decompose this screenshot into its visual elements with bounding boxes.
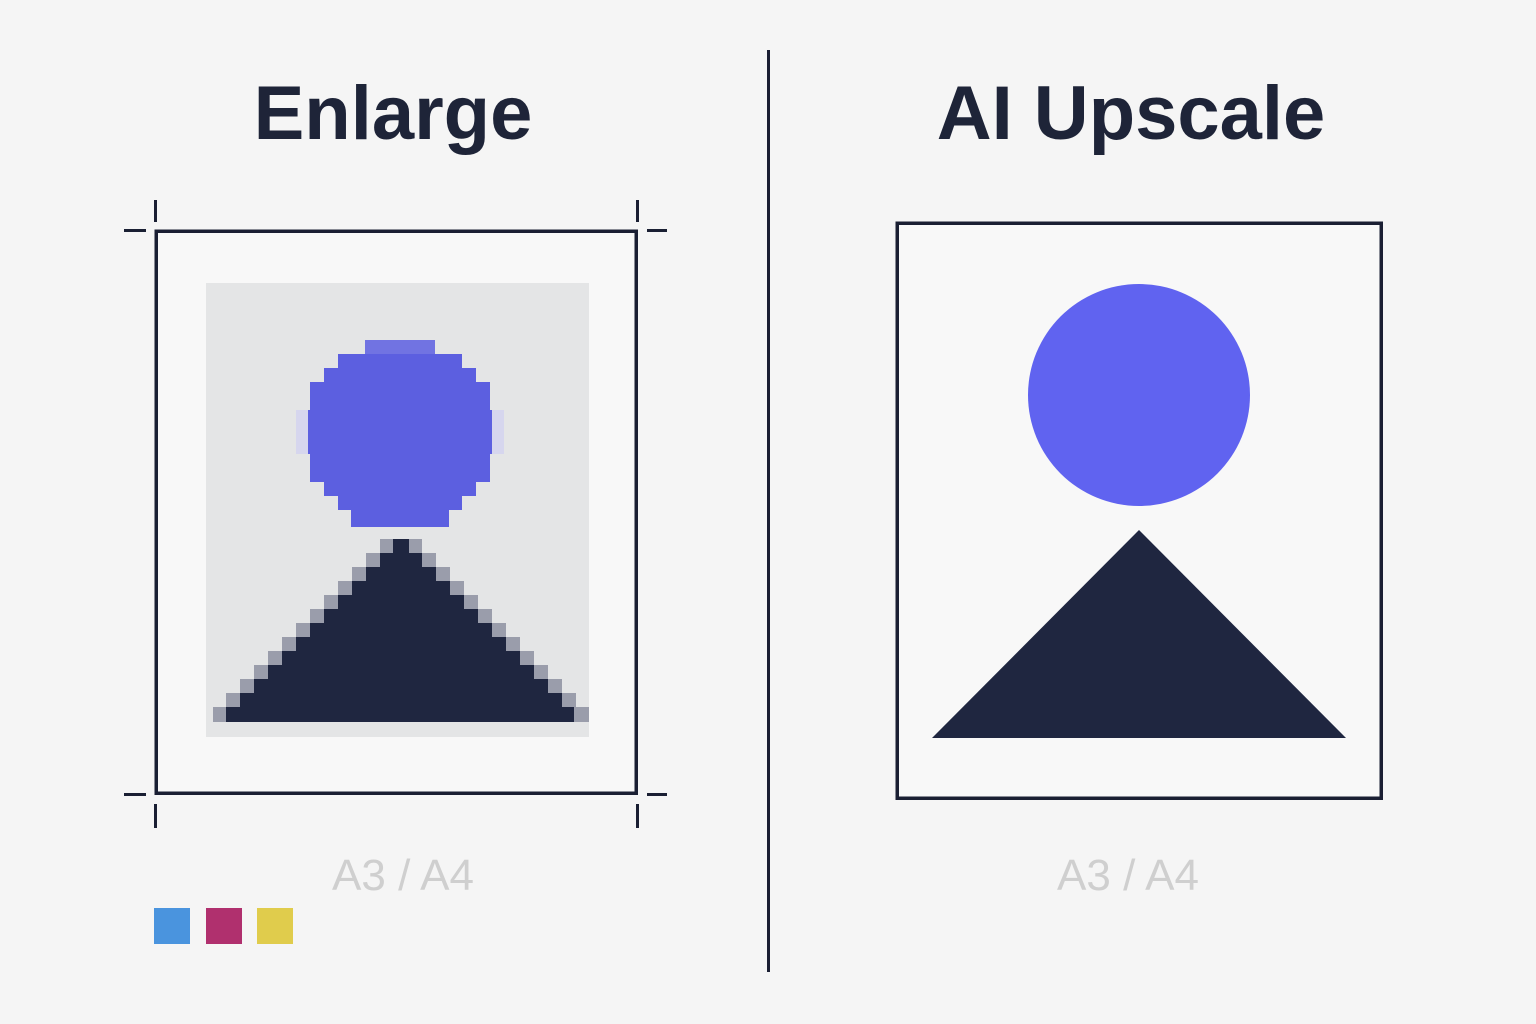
pixelated circle: [296, 340, 504, 527]
pixelated image: [206, 283, 589, 737]
panel: enlarged pixelated frame: [124, 200, 667, 828]
colour swatches: [154, 908, 293, 944]
smooth triangle: [932, 530, 1346, 738]
panel: AI upscaled frame: [897, 223, 1381, 798]
label: A3 / A4 right: A3 / A4: [1057, 851, 1199, 900]
smooth circle: [1028, 284, 1250, 506]
title: Enlarge: Enlarge: [254, 71, 532, 156]
title: AI Upscale: AI Upscale: [937, 71, 1325, 156]
pixelated triangle: [226, 539, 574, 722]
triangle edge shading: [213, 539, 589, 722]
divider line: [767, 50, 770, 972]
frame: [156, 231, 636, 793]
label: A3 / A4 left: A3 / A4: [332, 851, 474, 900]
crop marks: [124, 200, 667, 828]
